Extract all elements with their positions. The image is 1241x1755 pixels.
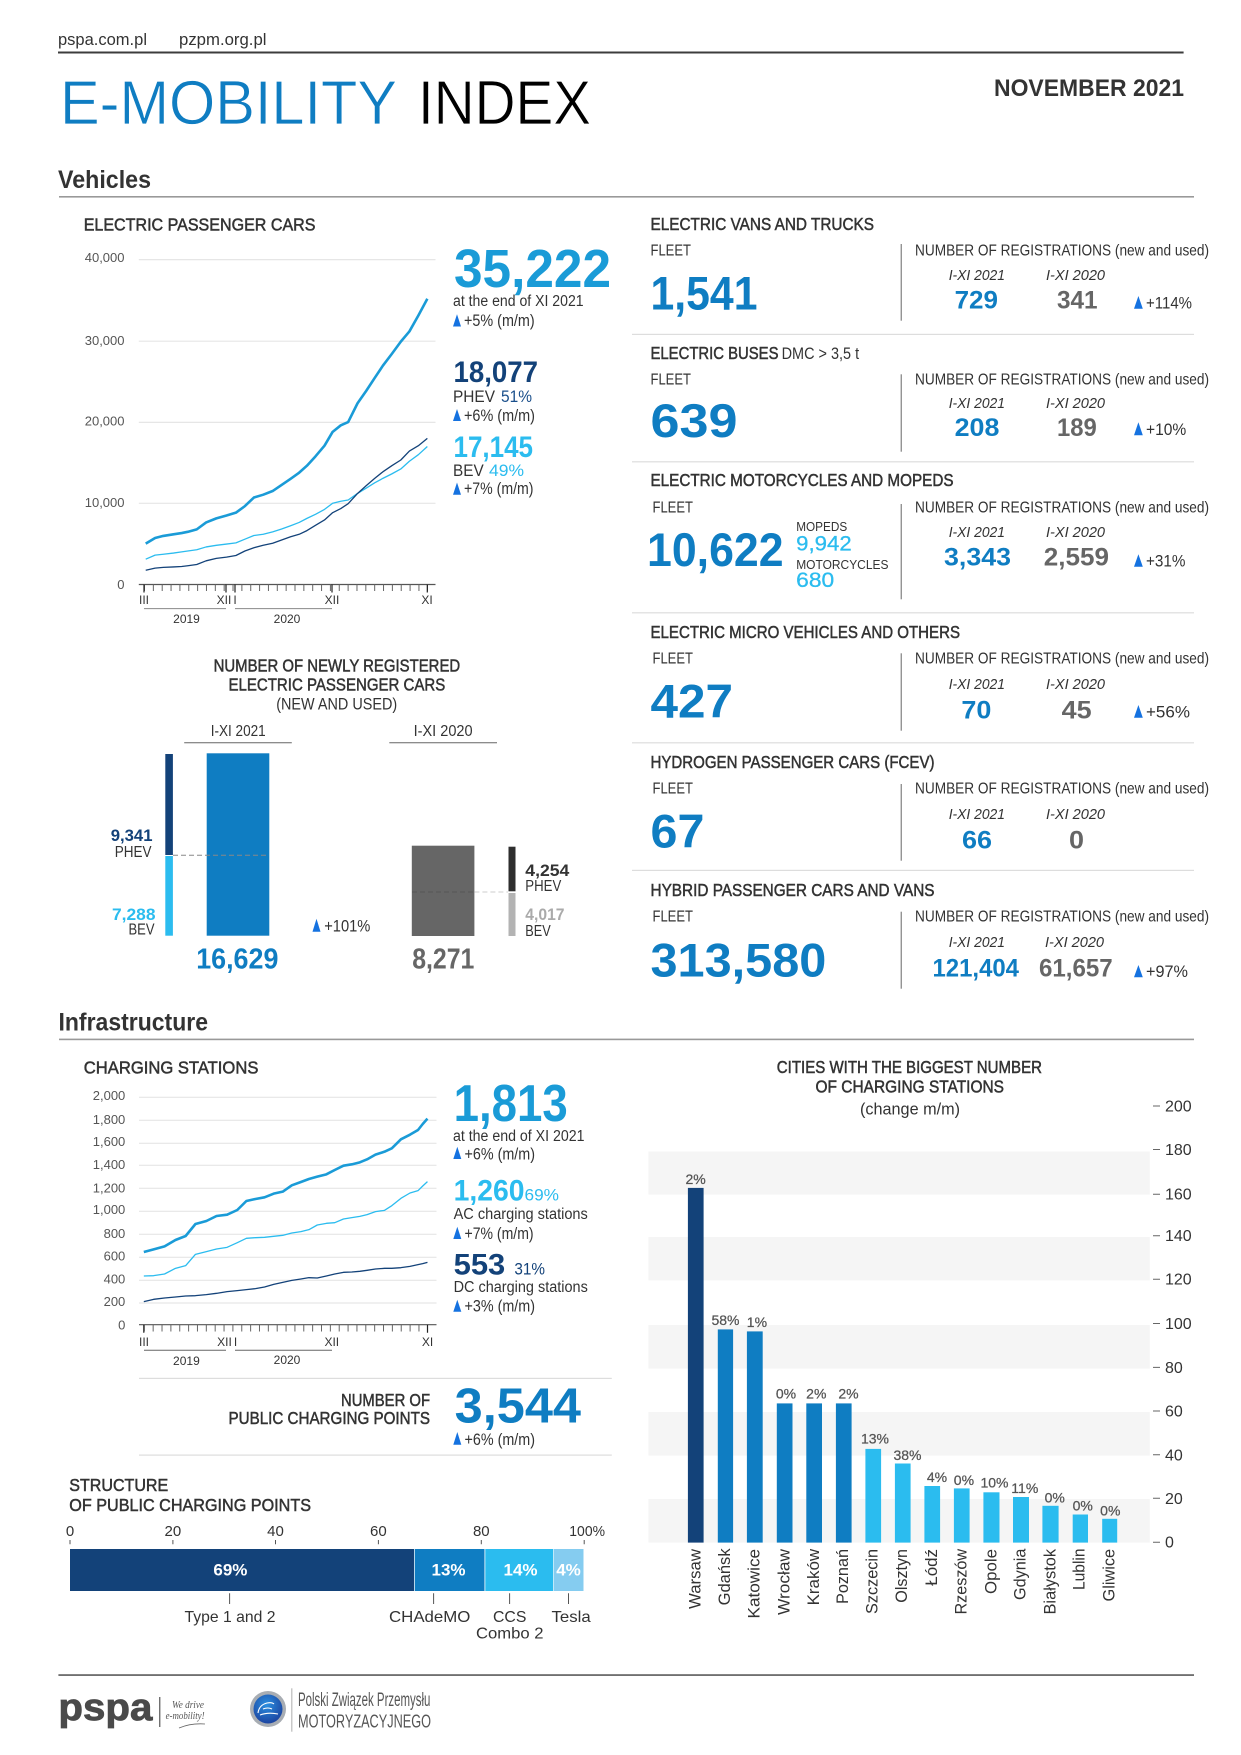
chart heading xyxy=(777,1057,1042,1118)
chart heading: CITIES WITH THE BIGGEST NUMBER xyxy=(777,1057,1042,1077)
y axis labels: 1,800 xyxy=(93,1112,125,1127)
labels 2021 xyxy=(111,826,278,975)
bar value labels: 2% xyxy=(685,1171,706,1187)
panel: hybrid passenger cars and vans: +97% xyxy=(1146,963,1188,981)
y axis labels: 1,200 xyxy=(93,1181,125,1196)
stats: passenger cars totals: at the end of XI 2021 xyxy=(453,293,584,310)
bar value labels xyxy=(685,1171,1120,1519)
panel: hydrogen passenger cars: FLEET xyxy=(652,780,693,797)
city labels: Lublin xyxy=(1070,1548,1089,1590)
bar value labels: 10% xyxy=(980,1475,1009,1491)
breakdown: mopeds and motorcycles: 9,942 xyxy=(796,532,852,555)
city labels xyxy=(686,1548,1118,1618)
percent axis: 100% xyxy=(569,1523,605,1540)
panel: electric vans and trucks: 341 xyxy=(1057,287,1098,315)
y axis labels: 600 xyxy=(104,1249,125,1264)
date: NOVEMBER 2021 xyxy=(994,75,1184,102)
panel: structure of public charging points xyxy=(66,1475,605,1642)
panel: hybrid passenger cars and vans: I-XI 2020 xyxy=(1045,934,1105,951)
panel: electric motorcycles and mopeds: 2,559 xyxy=(1044,544,1109,572)
x axis labels xyxy=(139,593,433,626)
change indicator: +101% xyxy=(324,917,371,935)
stats: charging stations totals: +3% (m/m) xyxy=(464,1298,535,1316)
logo: pspa xyxy=(58,1687,205,1729)
chart heading xyxy=(214,655,460,713)
stats: charging stations totals: 553 xyxy=(454,1248,505,1281)
panel: hybrid passenger cars and vans: 313,580 xyxy=(650,934,826,987)
labels 2020: 4,017 xyxy=(525,905,564,924)
labels 2020: 4,254 xyxy=(525,861,570,880)
bar value labels: 11% xyxy=(1011,1480,1038,1496)
callout: public charging points: 3,544 xyxy=(455,1380,581,1434)
stats: passenger cars totals: +6% (m/m) xyxy=(464,407,535,425)
y axis: 140 xyxy=(1165,1228,1192,1245)
y axis: 60 xyxy=(1165,1404,1183,1420)
stacked bar: 13% xyxy=(431,1561,466,1580)
panel: hybrid passenger cars and vans: HYBRID PASSENGER CARS AND VANS xyxy=(650,880,934,900)
stats: charging stations totals: 1,260 xyxy=(454,1175,524,1208)
chart heading xyxy=(69,1475,311,1515)
panel: electric micro vehicles: 427 xyxy=(650,674,733,727)
heading: infrastructure: Infrastructure xyxy=(58,1009,208,1037)
x axis labels: 2020 xyxy=(274,1353,301,1367)
y axis labels: 30,000 xyxy=(85,333,124,348)
panel: electric motorcycles and mopeds: I-XI 2021 xyxy=(949,524,1005,541)
city labels: Szczecin xyxy=(863,1549,882,1614)
y axis: 40 xyxy=(1165,1447,1183,1464)
panel: electric motorcycles and mopeds: FLEET xyxy=(652,499,693,516)
x axis labels: XII xyxy=(325,593,339,607)
bar category labels: Combo 2 xyxy=(476,1625,544,1642)
percent axis: 0 xyxy=(66,1523,74,1540)
bar value labels: 13% xyxy=(861,1431,889,1447)
stats: charging stations totals: AC charging stations xyxy=(454,1206,588,1223)
stats: charging stations totals: 69% xyxy=(524,1186,559,1205)
bars xyxy=(688,1188,1117,1543)
labels 2021: BEV xyxy=(128,921,155,938)
x axis labels: 2020 xyxy=(274,612,301,626)
panel: electric vans and trucks: ELECTRIC VANS AND TRUCKS xyxy=(650,214,874,234)
percent axis xyxy=(66,1523,605,1544)
panel: hybrid passenger cars and vans: 61,657 xyxy=(1039,955,1113,983)
stats: passenger cars totals: 51% xyxy=(501,387,532,406)
bar category labels: Type 1 and 2 xyxy=(184,1609,276,1626)
bar value labels: 2% xyxy=(806,1386,826,1402)
y axis labels: 20,000 xyxy=(85,414,124,429)
logo: pzpm wordmark: MOTORYZACYJNEGO xyxy=(298,1711,431,1731)
y axis: 20 xyxy=(1165,1491,1183,1508)
percent axis: 40 xyxy=(267,1523,284,1540)
panel: hybrid passenger cars and vans xyxy=(650,880,1209,989)
panel: electric buses: FLEET xyxy=(650,371,691,388)
panel: electric micro vehicles: 70 xyxy=(961,696,991,724)
stats: charging stations totals xyxy=(453,1075,588,1316)
stats: passenger cars totals: 49% xyxy=(489,461,524,480)
x axis labels: I xyxy=(234,1335,237,1349)
title: INDEX xyxy=(418,69,591,138)
y axis: 80 xyxy=(1165,1360,1183,1377)
bar value labels: 0% xyxy=(1045,1490,1065,1506)
city labels: Olsztyn xyxy=(892,1549,911,1603)
breakdown: mopeds and motorcycles: MOPEDS xyxy=(796,520,847,534)
y axis: 120 xyxy=(1165,1272,1192,1289)
bar category labels xyxy=(184,1593,591,1642)
panel: hybrid passenger cars and vans: FLEET xyxy=(652,908,693,925)
panel: electric vans and trucks: FLEET xyxy=(650,242,691,259)
title: E-MOBILITY xyxy=(60,69,397,138)
panel: electric buses: 189 xyxy=(1057,414,1097,442)
header links: pspa.com.pl xyxy=(58,31,147,49)
stats: charging stations totals: at the end of XI 2021 xyxy=(453,1128,584,1145)
panel: electric motorcycles and mopeds: +31% xyxy=(1146,553,1186,571)
logo: pspa: e-mobility! xyxy=(166,1711,205,1722)
stats: passenger cars totals: PHEV xyxy=(453,387,496,406)
stats: charging stations totals: 31% xyxy=(514,1259,545,1278)
panel: newly registered cars bar comparison: I-XI 2020 xyxy=(414,723,473,740)
callout: public charging points: NUMBER OF xyxy=(341,1390,430,1410)
bar value labels: 4% xyxy=(927,1469,947,1485)
bar value labels: 0% xyxy=(954,1472,974,1488)
panel: hydrogen passenger cars: 66 xyxy=(962,826,992,854)
panel: electric motorcycles and mopeds: ELECTRIC MOTORCYCLES AND MOPEDS xyxy=(650,470,954,490)
bar value labels: 58% xyxy=(711,1312,740,1328)
panel: electric vans and trucks: 1,541 xyxy=(650,266,758,319)
stats: passenger cars totals: BEV xyxy=(453,461,484,480)
panel: hydrogen passenger cars xyxy=(650,752,1209,861)
panel: electric micro vehicles: I-XI 2021 xyxy=(949,676,1005,693)
panel: electric buses: ELECTRIC BUSES xyxy=(650,343,778,363)
y axis: 160 xyxy=(1165,1187,1192,1204)
y axis labels xyxy=(93,1088,125,1333)
percent axis: 80 xyxy=(473,1523,490,1540)
y axis labels xyxy=(85,250,124,592)
bars 2020 xyxy=(412,846,516,936)
panel: electric vans and trucks: I-XI 2020 xyxy=(1046,267,1106,284)
bar value labels: 0% xyxy=(1100,1503,1120,1519)
city labels: Katowice xyxy=(745,1549,764,1618)
panel: electric buses: I-XI 2020 xyxy=(1046,395,1106,412)
stats: charging stations totals: +6% (m/m) xyxy=(464,1145,535,1163)
panel: electric buses: 208 xyxy=(955,414,999,442)
labels 2020: 8,271 xyxy=(412,943,475,975)
panel: hydrogen passenger cars: I-XI 2020 xyxy=(1046,806,1106,823)
city labels: Gdańsk xyxy=(715,1548,734,1605)
panel: hybrid passenger cars and vans: I-XI 2021 xyxy=(949,934,1005,951)
bars 2021 xyxy=(165,753,269,936)
city labels: Opole xyxy=(982,1549,1000,1594)
panel: electric motorcycles and mopeds: 10,622 xyxy=(647,523,784,576)
bar category labels: CCS xyxy=(493,1609,526,1626)
percent axis: 60 xyxy=(370,1523,387,1540)
panel: electric buses xyxy=(650,343,1209,452)
labels 2020: PHEV xyxy=(525,878,562,895)
bar category labels: CHAdeMO xyxy=(389,1609,470,1626)
chart heading: STRUCTURE xyxy=(69,1475,168,1495)
city labels: Łódź xyxy=(922,1549,941,1586)
city labels: Gliwice xyxy=(1100,1549,1118,1602)
stats: passenger cars totals: +5% (m/m) xyxy=(464,312,535,330)
y axis: 200 xyxy=(1165,1098,1192,1116)
panel: electric micro vehicles: 45 xyxy=(1062,696,1092,724)
panel: electric buses: I-XI 2021 xyxy=(949,395,1005,412)
line series xyxy=(144,1119,427,1302)
logo: pspa: We drive xyxy=(172,1700,205,1711)
city labels: Białystok xyxy=(1040,1548,1060,1614)
panel: electric micro vehicles: ELECTRIC MICRO VEHICLES AND OTHERS xyxy=(650,622,960,642)
labels 2021: PHEV xyxy=(115,844,152,861)
chart heading: OF PUBLIC CHARGING POINTS xyxy=(69,1495,311,1515)
x axis labels: XI xyxy=(421,593,433,607)
panel: electric motorcycles and mopeds xyxy=(647,470,1209,599)
chart heading: CHARGING STATIONS xyxy=(84,1057,258,1077)
y axis labels: 1,000 xyxy=(93,1202,125,1217)
y axis labels: 10,000 xyxy=(85,495,124,510)
chart heading: ELECTRIC PASSENGER CARS xyxy=(84,215,316,235)
stats: passenger cars totals: 18,077 xyxy=(454,356,538,389)
logo: pspa: pspa xyxy=(58,1687,153,1729)
logo: pzpm wordmark xyxy=(298,1690,431,1731)
y axis: 180 xyxy=(1165,1142,1192,1159)
city labels: Poznań xyxy=(833,1549,852,1604)
stacked bar: 14% xyxy=(503,1561,538,1580)
y axis labels: 400 xyxy=(104,1272,125,1287)
city labels: Rzeszów xyxy=(952,1548,971,1614)
bar value labels: 2% xyxy=(838,1386,859,1402)
chart heading: ELECTRIC PASSENGER CARS xyxy=(228,674,445,694)
panel: electric buses: DMC > 3,5 t xyxy=(782,344,859,363)
panel: electric buses: 639 xyxy=(650,394,738,447)
callout: public charging points xyxy=(228,1380,581,1449)
bar value labels: 1% xyxy=(747,1314,767,1330)
city labels: Warsaw xyxy=(686,1548,705,1609)
city labels: Gdynia xyxy=(1011,1548,1030,1600)
panel: newly registered cars bar comparison xyxy=(111,655,570,975)
labels 2021: 16,629 xyxy=(196,943,278,975)
chart heading: (change m/m) xyxy=(860,1100,960,1118)
panel: electric micro vehicles: I-XI 2020 xyxy=(1046,676,1106,693)
line series xyxy=(146,299,427,570)
city labels: Kraków xyxy=(804,1548,823,1605)
x axis labels: XII xyxy=(217,1335,232,1349)
stats: charging stations totals: +7% (m/m) xyxy=(464,1225,534,1243)
panel: electric buses: +10% xyxy=(1146,421,1187,439)
panel: electric motorcycles and mopeds: I-XI 2020 xyxy=(1046,524,1106,541)
y axis labels: 1,400 xyxy=(93,1157,125,1172)
panel: hydrogen passenger cars: 0 xyxy=(1069,826,1084,854)
panel: hydrogen passenger cars: I-XI 2021 xyxy=(949,806,1005,823)
labels 2020 xyxy=(412,861,570,975)
city labels: Wrocław xyxy=(774,1548,794,1615)
y axis xyxy=(1153,1098,1192,1552)
chart heading: (NEW AND USED) xyxy=(276,695,397,713)
logo: pzpm emblem xyxy=(250,1691,286,1727)
stats: passenger cars totals: 17,145 xyxy=(454,431,533,464)
panel: electric vans and trucks: 729 xyxy=(955,287,998,315)
y axis labels: 1,600 xyxy=(93,1134,125,1149)
bar value labels: 0% xyxy=(1073,1498,1093,1514)
header links: pzpm.org.pl xyxy=(179,31,266,49)
panel: electric motorcycles and mopeds: 3,343 xyxy=(944,544,1011,572)
panel: electric micro vehicles: FLEET xyxy=(652,650,693,667)
bar category labels: Tesla xyxy=(552,1609,591,1626)
y axis labels: 800 xyxy=(104,1226,125,1241)
stats: charging stations totals: DC charging stations xyxy=(454,1279,588,1296)
x axis labels: XI xyxy=(422,1335,433,1349)
bar value labels: 38% xyxy=(893,1447,922,1463)
chart heading: OF CHARGING STATIONS xyxy=(816,1077,1004,1097)
logo: pzpm wordmark: Polski Związek Przemysłu xyxy=(298,1690,430,1711)
panel: electric micro vehicles: +56% xyxy=(1146,704,1190,722)
panel: newly registered cars bar comparison: I-XI 2021 xyxy=(211,723,266,740)
x axis labels: 2019 xyxy=(173,612,200,626)
x axis labels: III xyxy=(139,1335,149,1349)
y axis labels: 0 xyxy=(118,1318,125,1333)
labels 2021: 7,288 xyxy=(112,905,156,924)
panel: hydrogen passenger cars: 67 xyxy=(650,804,704,857)
y axis labels: 0 xyxy=(117,577,124,592)
stats: passenger cars totals xyxy=(453,239,611,498)
panel: electric vans and trucks xyxy=(650,214,1209,321)
x axis labels: I xyxy=(233,593,237,607)
stats: charging stations totals: 1,813 xyxy=(454,1075,568,1133)
y axis labels: 40,000 xyxy=(85,250,124,265)
labels 2021: 9,341 xyxy=(111,826,152,845)
callout: public charging points: PUBLIC CHARGING POINTS xyxy=(228,1408,430,1428)
stats: passenger cars totals: +7% (m/m) xyxy=(464,480,534,498)
panel: cities bar chart xyxy=(648,1057,1192,1618)
stats: passenger cars totals: 35,222 xyxy=(454,239,611,299)
stacked bar xyxy=(70,1549,584,1591)
x axis labels: XII xyxy=(324,1335,339,1349)
panel: electric vans and trucks: I-XI 2021 xyxy=(949,267,1005,284)
percent axis: 20 xyxy=(165,1523,181,1540)
stacked bar: 4% xyxy=(556,1561,581,1580)
chart heading: NUMBER OF NEWLY REGISTERED xyxy=(214,655,460,675)
x axis labels: III xyxy=(139,593,149,607)
breakdown: mopeds and motorcycles: MOTORCYCLES xyxy=(796,558,888,572)
header links xyxy=(58,31,266,49)
x axis labels: XII xyxy=(217,593,231,607)
title xyxy=(60,69,591,138)
callout: public charging points: +6% (m/m) xyxy=(464,1431,535,1449)
breakdown: mopeds and motorcycles xyxy=(796,520,888,592)
heading: vehicles: Vehicles xyxy=(58,166,151,194)
bar value labels: 0% xyxy=(776,1386,796,1402)
stacked bar: 69% xyxy=(213,1561,247,1580)
y axis: 100 xyxy=(1165,1316,1192,1333)
panel: hybrid passenger cars and vans: 121,404 xyxy=(932,955,1019,983)
panel: charging stations line chart xyxy=(84,1057,437,1368)
y axis labels: 2,000 xyxy=(93,1088,125,1103)
x axis labels: 2019 xyxy=(173,1354,200,1368)
y axis labels: 200 xyxy=(104,1294,125,1309)
panel: electric passenger cars line chart xyxy=(84,215,435,626)
panel: hydrogen passenger cars: HYDROGEN PASSENGER CARS (FCEV) xyxy=(650,752,934,772)
breakdown: mopeds and motorcycles: 680 xyxy=(796,569,834,592)
panel: electric vans and trucks: +114% xyxy=(1146,295,1192,313)
y axis: 0 xyxy=(1165,1535,1174,1552)
panel: electric micro vehicles xyxy=(650,622,1209,731)
x axis labels xyxy=(139,1335,433,1368)
labels 2020: BEV xyxy=(525,923,551,940)
